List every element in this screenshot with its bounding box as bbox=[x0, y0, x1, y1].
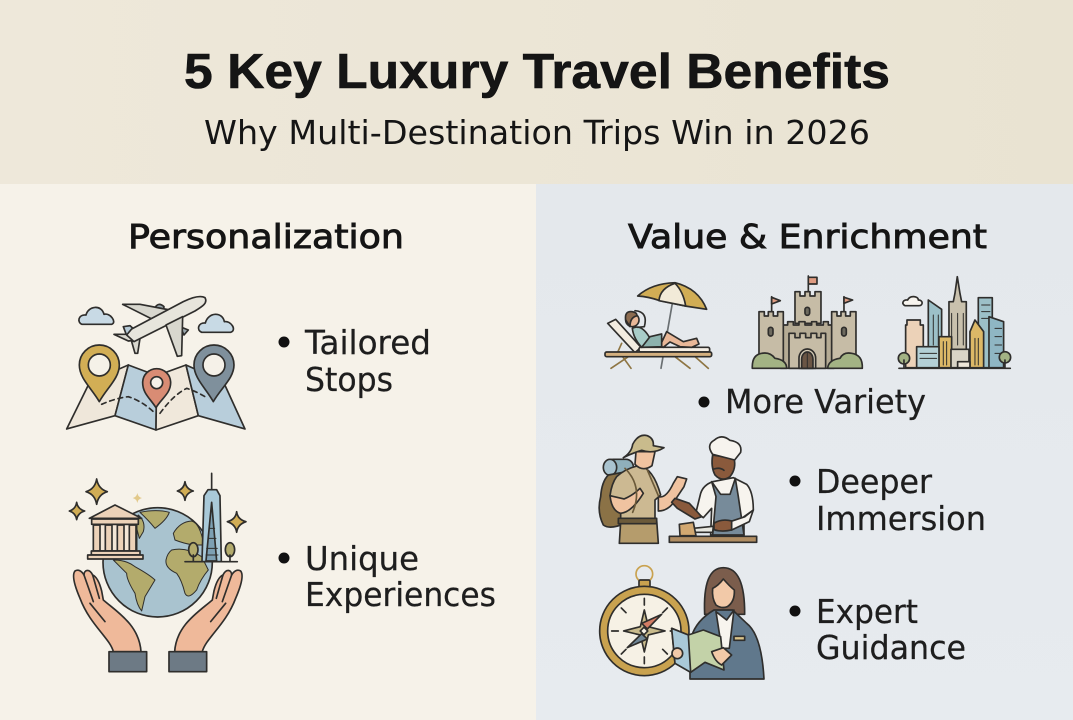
right hand bbox=[175, 570, 242, 652]
city bbox=[898, 277, 1011, 368]
icon: map, pins and plane bbox=[67, 297, 245, 430]
gold pin bbox=[79, 345, 119, 402]
icons: beach, castle and city bbox=[605, 276, 1011, 368]
bullet: Unique Experiences bbox=[278, 539, 496, 614]
title: 5 Key Luxury Travel Benefits bbox=[184, 45, 890, 99]
right cloud bbox=[198, 314, 233, 332]
bullet: Unique Experiences: Experiences bbox=[305, 575, 496, 614]
header band bbox=[0, 0, 1073, 184]
bullet: Tailored Stops: Stops bbox=[305, 360, 393, 399]
plane bbox=[114, 297, 206, 356]
left cloud bbox=[79, 307, 114, 324]
subtitle: Why Multi-Destination Trips Win in 2026 bbox=[204, 113, 870, 152]
explorer bbox=[599, 435, 687, 543]
guide bbox=[690, 568, 764, 679]
left cuff bbox=[109, 652, 147, 672]
lounger and umbrella bbox=[605, 283, 712, 368]
bullet: Deeper Immersion: Immersion bbox=[816, 499, 986, 538]
hands bbox=[672, 648, 683, 659]
skyscraper and trees bbox=[185, 473, 237, 562]
pink pin bbox=[143, 369, 171, 408]
globe bbox=[103, 508, 212, 617]
bullet: Tailored Stops: Tailored bbox=[304, 323, 431, 362]
compass bbox=[600, 566, 689, 676]
bullet: More Variety: More Variety bbox=[725, 382, 926, 421]
sparkles bbox=[69, 479, 246, 532]
bullet: Deeper Immersion: Deeper bbox=[816, 462, 932, 501]
left hand bbox=[74, 570, 141, 652]
heading: value and enrichment: Value & Enrichment bbox=[628, 217, 987, 256]
bullet: Tailored Stops bbox=[278, 323, 431, 399]
heading: personalization: Personalization bbox=[128, 217, 404, 256]
bullet: Expert Guidance bbox=[790, 592, 966, 667]
grey pin bbox=[194, 345, 234, 402]
map bbox=[67, 365, 245, 430]
bullet: Deeper Immersion bbox=[790, 462, 986, 538]
right cuff bbox=[169, 652, 207, 672]
panel: value and enrichment bbox=[536, 184, 1073, 720]
castle bbox=[752, 276, 862, 368]
temple bbox=[88, 505, 143, 559]
icon: compass and guide bbox=[600, 566, 764, 679]
panel: personalization bbox=[0, 184, 536, 720]
continents bbox=[113, 511, 208, 611]
chef bbox=[672, 437, 753, 536]
icon: explorer and chef bbox=[599, 435, 757, 543]
bullet: Expert Guidance: Expert bbox=[816, 592, 918, 631]
icon: globe in hands bbox=[69, 473, 246, 672]
bullet: Expert Guidance: Guidance bbox=[816, 628, 966, 667]
counter bbox=[669, 536, 757, 542]
bullet: Unique Experiences: Unique bbox=[305, 539, 419, 578]
folded map bbox=[672, 628, 724, 672]
